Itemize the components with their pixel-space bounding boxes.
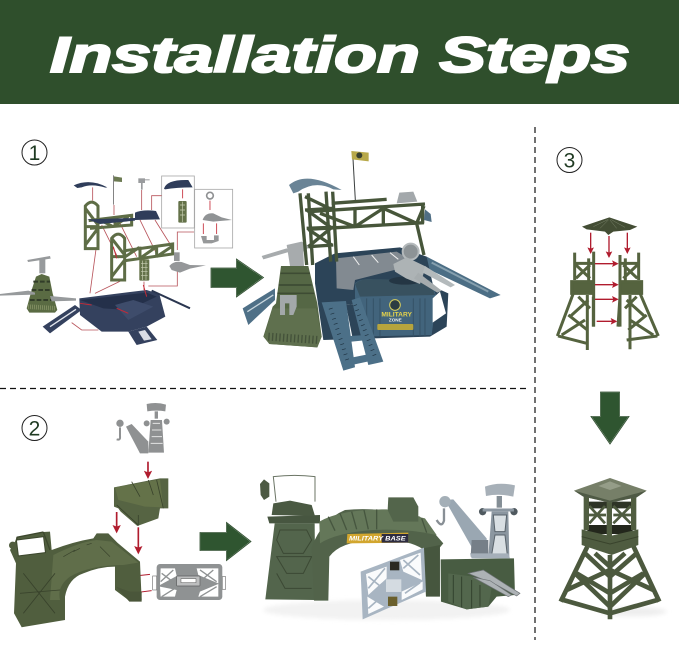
red down arrows bbox=[591, 233, 627, 257]
arrow to assembled gate bbox=[200, 524, 250, 560]
green arch part bbox=[9, 532, 142, 627]
red arrow down bbox=[145, 462, 150, 477]
tower band bbox=[582, 529, 638, 555]
red side arrows bbox=[595, 264, 617, 321]
base logo: ZONE bbox=[389, 317, 402, 322]
bridge truss bbox=[308, 199, 425, 255]
assembled gate photo bbox=[260, 475, 520, 620]
right tower half bbox=[618, 253, 658, 349]
tower roof part bbox=[582, 217, 637, 235]
arch bbox=[312, 509, 443, 601]
lookout frame bbox=[273, 475, 315, 502]
arch banner: MILITARY BASE bbox=[349, 536, 407, 542]
connector lines bbox=[72, 187, 194, 330]
navy base bbox=[43, 290, 190, 345]
step 2 number badge: 2 bbox=[29, 418, 40, 440]
left tower half bbox=[557, 252, 594, 350]
crane bbox=[437, 484, 518, 558]
panel: step 3 bbox=[557, 148, 667, 619]
gun part bbox=[138, 178, 150, 190]
left tower frame with bridge bbox=[85, 202, 132, 249]
tower legs bbox=[561, 546, 659, 619]
step 1 number badge bbox=[22, 140, 47, 165]
rear gun bbox=[397, 192, 417, 203]
step 1 exploded parts diagram bbox=[0, 175, 233, 345]
box 1 contents bbox=[164, 180, 193, 223]
tower cabin bbox=[586, 495, 634, 537]
step 3 number badge: 3 bbox=[564, 150, 575, 172]
arrow to assembled base bbox=[212, 260, 262, 296]
roof part bbox=[74, 182, 107, 188]
step 1 number badge: 1 bbox=[29, 142, 40, 165]
soft shadow bbox=[600, 607, 667, 616]
title: Installation Steps bbox=[50, 27, 630, 83]
box 2 contents bbox=[201, 192, 232, 243]
dotted panel bbox=[139, 259, 149, 281]
front block bbox=[355, 279, 437, 337]
assembled watchtower photo bbox=[561, 478, 667, 619]
soft shadow bbox=[263, 600, 510, 620]
arch banner bbox=[347, 533, 408, 543]
crane part bbox=[116, 403, 170, 453]
header banner bbox=[0, 0, 679, 104]
right frame cut-out bbox=[433, 292, 446, 323]
front twin gun bbox=[389, 244, 455, 293]
door part bbox=[153, 564, 226, 600]
step 2 exploded parts diagram bbox=[9, 403, 226, 627]
step 2 number badge bbox=[22, 416, 47, 440]
top gun bbox=[262, 242, 310, 266]
arrow down bbox=[592, 392, 628, 443]
red arrows to arch bbox=[117, 512, 152, 593]
base logo: MILITARY bbox=[381, 312, 413, 319]
roof bbox=[289, 179, 342, 193]
red assembly arrows bbox=[80, 247, 147, 313]
base body bbox=[315, 247, 448, 340]
tower side gun bbox=[280, 295, 297, 315]
turret guns bbox=[0, 256, 76, 301]
grey platform bbox=[336, 252, 418, 290]
twin gun bbox=[468, 570, 520, 597]
right tower frame with bridge bbox=[112, 234, 173, 280]
roof box bbox=[388, 497, 418, 522]
gun tower body bbox=[263, 266, 322, 347]
panel: step 1 bbox=[0, 140, 501, 371]
left block bbox=[265, 501, 320, 600]
upper navy part bbox=[135, 210, 160, 220]
panel: step 2 bbox=[9, 403, 520, 627]
flag bbox=[351, 151, 369, 200]
assembled base photo bbox=[243, 151, 501, 371]
step 3 exploded parts diagram bbox=[557, 217, 658, 350]
green block part bbox=[114, 478, 168, 526]
green turret bbox=[27, 274, 57, 313]
base logo bbox=[377, 300, 413, 330]
flag part bbox=[113, 175, 122, 205]
lower right block bbox=[441, 558, 515, 609]
step 3 number badge bbox=[557, 148, 582, 172]
watchtower frame bbox=[300, 192, 337, 265]
right loose gun bbox=[169, 252, 206, 273]
front ramp bbox=[322, 297, 383, 371]
parts boxes bbox=[162, 176, 233, 248]
tower roof bbox=[574, 478, 647, 503]
side ramps bbox=[243, 257, 501, 325]
door bbox=[361, 548, 426, 619]
